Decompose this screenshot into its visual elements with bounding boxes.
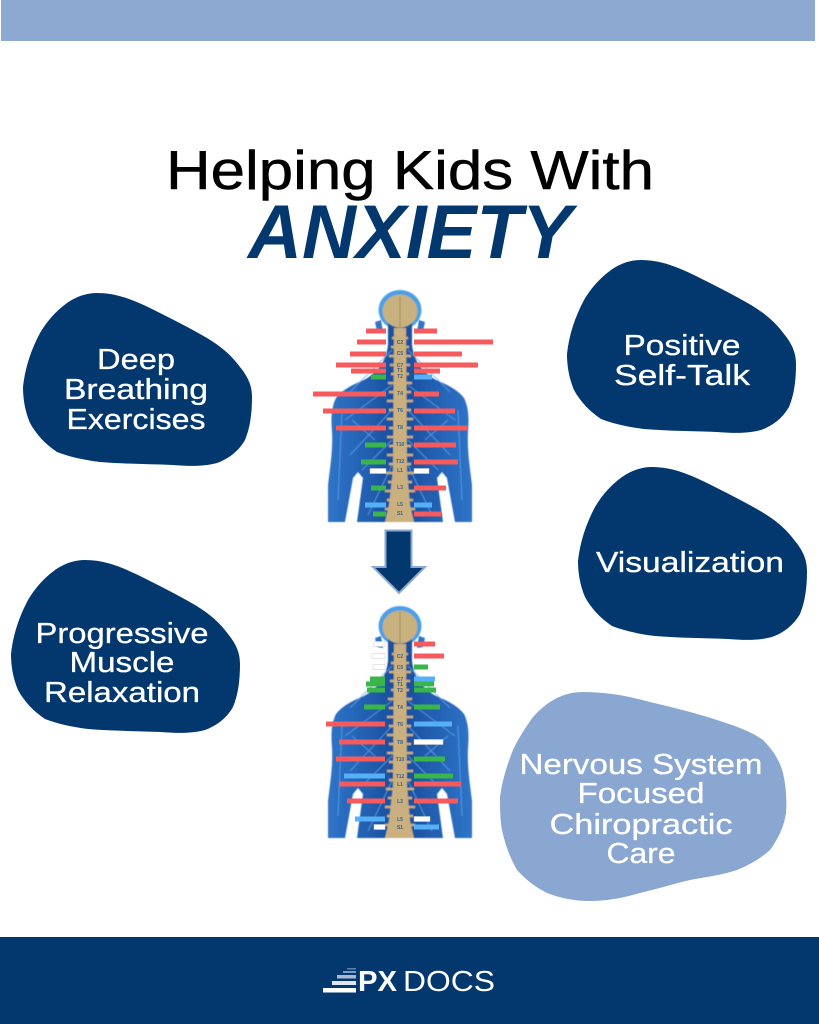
panel: visualization xyxy=(578,467,807,640)
panel: nervous system focused chiropractic care: Care xyxy=(606,838,676,870)
chart: spine scan before: C5 xyxy=(397,351,403,357)
chart: spine scan before: C2 xyxy=(397,340,403,346)
logo: PX DOCS: PX xyxy=(358,966,398,998)
chart: spine scan after: T8 xyxy=(397,740,403,746)
chart: spine scan before: T1 xyxy=(397,368,403,374)
panel: deep breathing exercises: Breathing xyxy=(64,374,208,406)
panel: nervous system focused chiropractic care xyxy=(500,692,786,901)
chart: spine scan before: L1 xyxy=(397,468,403,474)
panel: nervous system focused chiropractic care: Chiropractic xyxy=(550,809,732,841)
chart: spine scan after: C2 xyxy=(397,654,403,660)
chart: spine scan after: L3 xyxy=(397,799,403,805)
chart: spine scan after: T12 xyxy=(396,774,405,780)
chart: spine scan before: T12 xyxy=(396,459,405,465)
chart: spine scan before: T2 xyxy=(397,374,403,380)
panel: positive self-talk: Positive xyxy=(624,330,740,362)
chart: spine scan after: T1 xyxy=(397,682,403,688)
panel: progressive muscle relaxation: Progressive xyxy=(36,618,208,650)
chart: spine scan after: S1 xyxy=(397,825,403,831)
panel: positive self-talk: Self-Talk xyxy=(614,360,751,392)
chart: spine scan after: T2 xyxy=(397,688,403,694)
chart: spine scan before: L3 xyxy=(397,485,403,491)
title: Helping Kids With xyxy=(166,139,654,201)
panel: nervous system focused chiropractic care: Focused xyxy=(578,778,704,810)
panel: visualization: Visualization xyxy=(596,547,784,579)
panel: progressive muscle relaxation: Relaxation xyxy=(44,677,200,709)
chart: spine scan after: C5 xyxy=(397,665,403,671)
panel: deep breathing exercises xyxy=(23,293,252,466)
footer band xyxy=(0,937,819,1024)
chart: spine scan after xyxy=(326,606,472,838)
chart: spine scan after: T4 xyxy=(397,705,403,711)
title xyxy=(166,139,654,275)
panel: progressive muscle relaxation xyxy=(11,560,240,733)
chart: spine scan before: T8 xyxy=(397,425,403,431)
chart: spine scan after: C7 xyxy=(397,677,403,683)
panel: deep breathing exercises: Exercises xyxy=(66,404,206,436)
top banner xyxy=(1,0,815,41)
chart: spine scan before: T10 xyxy=(396,442,405,448)
chart: spine scan after: T10 xyxy=(396,757,405,763)
panel: positive self-talk xyxy=(567,260,796,433)
chart: spine scan before: S1 xyxy=(397,511,403,517)
arrow: down xyxy=(373,530,425,593)
chart: spine scan after: L1 xyxy=(397,782,403,788)
panel: deep breathing exercises: Deep xyxy=(97,344,175,376)
title: ANXIETY xyxy=(246,190,578,275)
panel: progressive muscle relaxation: Muscle xyxy=(70,647,174,679)
logo: PX DOCS: DOCS xyxy=(403,966,495,998)
chart: spine scan before xyxy=(313,290,493,522)
chart: spine scan before: L5 xyxy=(397,502,403,508)
chart: spine scan before: C7 xyxy=(397,363,403,369)
logo: PX DOCS xyxy=(323,966,495,998)
chart: spine scan after: T6 xyxy=(397,722,403,728)
panel: nervous system focused chiropractic care: Nervous System xyxy=(520,749,762,781)
chart: spine scan before: T4 xyxy=(397,391,403,397)
chart: spine scan before: T6 xyxy=(397,408,403,414)
chart: spine scan after: L5 xyxy=(397,817,403,823)
